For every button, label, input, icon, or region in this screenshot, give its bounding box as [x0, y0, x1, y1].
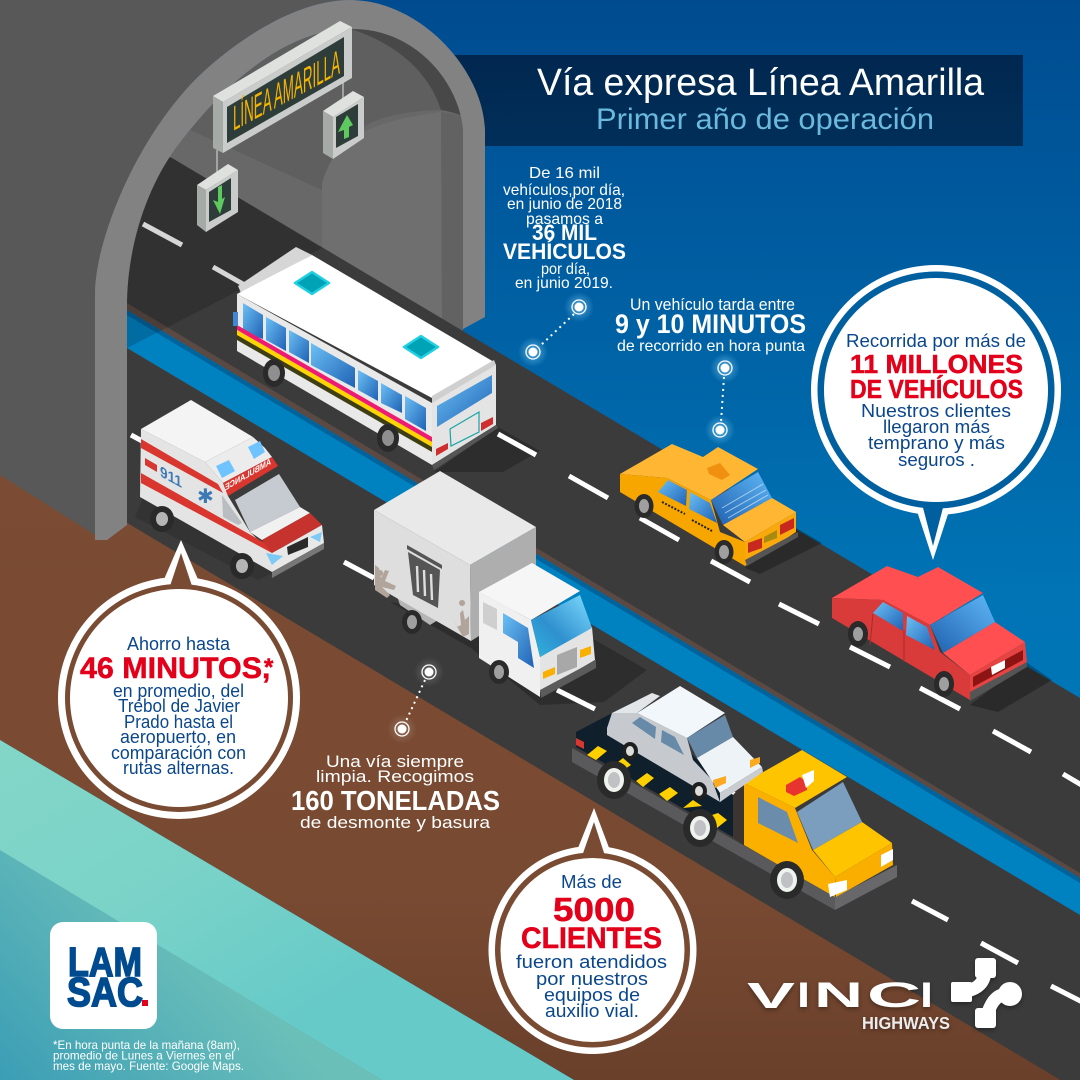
- callout: 11 millones: Recorrida por más de: [846, 330, 1026, 351]
- text: vehicles per day: pasamos a: [526, 211, 603, 228]
- logo: VINCI Highways: C: [867, 976, 921, 1015]
- text: vehicles per day: De 16 mil: [529, 165, 600, 182]
- pointer: vehicles per day: [518, 292, 594, 367]
- white car on bed: [607, 686, 763, 802]
- callout: 5000 clientes: fueron atendidos: [516, 952, 667, 972]
- road median: blue strip: [95, 284, 1080, 915]
- text: 160 toneladas: de desmonte y basura: [300, 813, 491, 832]
- text: vehicles per day: VEHÍCULOS: [503, 239, 626, 264]
- lower road: [95, 329, 1080, 1080]
- text: vehicles per day: vehículos,por día,: [503, 182, 625, 199]
- logo: VINCI Highways: I: [920, 976, 933, 1015]
- ground: teal band: [0, 740, 574, 1080]
- tunnel shadow on road: [127, 132, 322, 348]
- ground: brown earth: [0, 447, 1060, 1080]
- footnote: [53, 1038, 244, 1073]
- vehicle shadows on road: [135, 427, 1052, 712]
- callout: 46 minutos: aeropuerto, en: [120, 727, 236, 747]
- ground: teal lower band: [0, 850, 383, 1080]
- text: travel time: 9 y 10 MINUTOS: [615, 309, 806, 339]
- pointer: travel time: [705, 353, 740, 445]
- callout: 46 minutos: [58, 540, 300, 819]
- taxi: [620, 444, 798, 566]
- text: vehicles per day: [503, 165, 626, 292]
- logo: LAMSAC: [50, 922, 157, 1029]
- callout: 46 minutos: *: [264, 654, 274, 681]
- footnote: mes de mayo. Fuente: Google Maps.: [53, 1059, 244, 1073]
- garbage truck: [374, 471, 596, 698]
- text: vehicles per day: en junio 2019.: [515, 275, 613, 292]
- ambulance: [140, 400, 324, 579]
- callout: 5000 clientes: [488, 808, 696, 1054]
- icon: up arrow signal: [323, 91, 364, 159]
- title block: Primer año de operación: [596, 103, 934, 136]
- road dashes: [131, 224, 1080, 1006]
- bus: [233, 247, 498, 470]
- header panel background: [430, 55, 1023, 146]
- logo: VINCI Highways: N: [814, 976, 863, 1015]
- callout: 11 millones: seguros .: [898, 450, 975, 470]
- red car: [832, 566, 1027, 701]
- callout: 46 minutos: comparación con: [111, 743, 246, 763]
- callout: 46 minutos: en promedio, del: [113, 681, 244, 701]
- text: 160 toneladas: [291, 752, 500, 832]
- callout: 46 minutos: 46 MINUTOS: [80, 652, 262, 685]
- callout: 46 minutos: Trébol de Javier: [118, 696, 240, 716]
- logo: VINCI Highways: HIGHWAYS: [862, 1013, 950, 1033]
- tunnel interior: [127, 29, 463, 530]
- text: travel time: de recorrido en hora punta: [617, 338, 805, 355]
- icon: trash bin: [407, 545, 442, 608]
- text: travel time: [615, 296, 806, 355]
- callout: 11 millones: DE VEHÍCULOS: [850, 374, 1023, 404]
- callout: 5000 clientes: equipos de: [544, 985, 640, 1005]
- logo: LAMSAC: SAC: [67, 969, 143, 1015]
- callout: 11 millones: [811, 265, 1061, 560]
- upper road: [95, 139, 1080, 876]
- tunnel wall and arch: [0, 0, 485, 540]
- ambulance: 911: [160, 463, 182, 492]
- callout: 46 minutos: Ahorro hasta: [127, 634, 231, 654]
- footnote: promedio de Lunes a Viernes en el: [53, 1048, 234, 1062]
- logo: VINCI Highways: [747, 958, 1022, 1033]
- text: vehicles per day: 36 MIL: [532, 220, 597, 245]
- pointer: tonnes collected: [387, 657, 444, 744]
- title block: [537, 62, 985, 136]
- text: travel time: Un vehículo tarda entre: [630, 296, 795, 314]
- tow truck with white car: [572, 686, 897, 910]
- ambulance: ✱: [197, 484, 214, 508]
- text: vehicles per day: en junio de 2018: [507, 196, 622, 213]
- text: vehicles per day: por día,: [541, 261, 590, 278]
- callout: 5000 clientes: 5000: [553, 891, 635, 928]
- title block: Vía expresa Línea Amarilla: [537, 62, 985, 104]
- callout: 5000 clientes: CLIENTES: [521, 922, 662, 955]
- text: 160 toneladas: limpia. Recogimos: [316, 767, 474, 786]
- logo: VINCI Highways: I: [797, 976, 810, 1015]
- logo: LAMSAC: LAM: [68, 939, 142, 985]
- icon: down arrow signal: [197, 164, 238, 232]
- callout: 11 millones: Nuestros clientes: [861, 401, 1011, 421]
- callout: 11 millones: llegaron más: [883, 417, 990, 437]
- text: 160 toneladas: 160 TONELADAS: [291, 785, 500, 816]
- callout: 46 minutos: Prado hasta el: [124, 712, 233, 732]
- callout: 5000 clientes: Más de: [561, 872, 622, 892]
- text: 160 toneladas: Una vía siempre: [326, 752, 464, 771]
- callout: 46 minutos: rutas alternas.: [123, 758, 234, 778]
- callout: 11 millones: 11 MILLONES: [850, 349, 1023, 379]
- callout: 5000 clientes: auxilio vial.: [545, 1001, 639, 1021]
- callout: 11 millones: temprano y más: [868, 433, 1005, 453]
- logo: VINCI Highways: V: [747, 975, 795, 1016]
- footnote: *En hora punta de la mañana (8am),: [53, 1038, 240, 1052]
- callout: 46 minutos: ,: [262, 652, 270, 685]
- callout: 5000 clientes: por nuestros: [536, 969, 648, 989]
- ambulance: AMBULANCE: [225, 457, 271, 494]
- sign: LÍNEA AMARILLA: [213, 21, 352, 176]
